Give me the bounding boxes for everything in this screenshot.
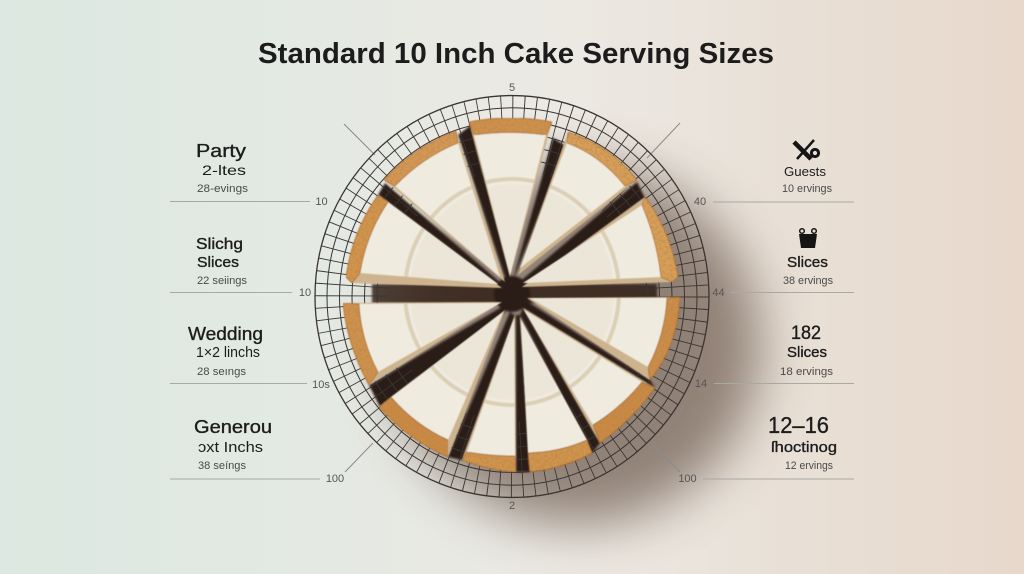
right row: 182 slices: 14 bbox=[695, 378, 707, 390]
slice: upper right bbox=[518, 132, 637, 275]
slice: right upper bbox=[522, 197, 678, 287]
slice: top bbox=[469, 118, 552, 277]
slice: lower left bbox=[379, 310, 505, 457]
right row: Slices: 38 ervings bbox=[783, 275, 833, 287]
right row: 182 slices bbox=[695, 323, 854, 390]
left row: Generous: 100 bbox=[326, 473, 344, 485]
icon: crossed utensils bbox=[794, 140, 819, 159]
leader lines bbox=[344, 123, 680, 472]
right row: Guests: 10 ervings bbox=[782, 183, 832, 195]
right row: Guests: Guests bbox=[784, 164, 827, 179]
left row: Slicing: 22 seiings bbox=[197, 275, 247, 287]
right row: 12-16: 12 ervings bbox=[785, 460, 833, 472]
right row: 12-16: 12–16 bbox=[768, 412, 829, 438]
left row: Party: 10 bbox=[315, 196, 328, 208]
icon: cup with two handles bbox=[799, 229, 817, 248]
right row: Slices: 44 bbox=[712, 287, 725, 299]
right row: Slices: Slices bbox=[787, 254, 828, 271]
right row: 12-16 bbox=[678, 412, 854, 485]
slice: bottom left bbox=[462, 315, 516, 472]
title: Standard 10 Inch Cake Serving Sizes bbox=[258, 38, 774, 70]
left row: Wedding: 28 seıngs bbox=[197, 366, 247, 378]
left row: Party: Party bbox=[196, 141, 246, 161]
left row: Slicing: Slices bbox=[197, 254, 239, 271]
circular measuring grid bbox=[315, 96, 709, 497]
dark gaps between slices bbox=[369, 125, 657, 472]
right row: Guests bbox=[694, 140, 854, 208]
cast shadow of cake bbox=[390, 165, 760, 525]
left row: Slicing bbox=[170, 236, 311, 299]
left row: Party: 28-evings bbox=[197, 183, 249, 195]
left row: Wedding bbox=[170, 324, 330, 391]
slice: lower right bbox=[523, 308, 655, 443]
left row: Wedding: 10s bbox=[312, 379, 330, 391]
left row: Generous: ɔxt Inchs bbox=[198, 439, 263, 456]
scale number: top: 5 bbox=[509, 82, 515, 94]
right row: Guests: 40 bbox=[694, 196, 706, 208]
left row: Party: 2-ltes bbox=[202, 162, 246, 178]
slice: left upper bbox=[346, 195, 502, 288]
slice: right lower bbox=[527, 297, 680, 380]
frosting ring detail bbox=[405, 179, 619, 405]
right row: Slices bbox=[712, 229, 854, 299]
slice: left lower bbox=[343, 302, 502, 385]
left row: Wedding: Wedding bbox=[188, 324, 263, 344]
cake: eleven slices bbox=[343, 118, 680, 472]
left row: Slicing: Slichg bbox=[196, 236, 243, 253]
slice: bottom right bbox=[520, 317, 592, 472]
left row: Slicing: 10 bbox=[299, 287, 311, 299]
left row: Generous: Generou bbox=[194, 417, 272, 437]
left row: Wedding: 1×2 linchs bbox=[196, 344, 260, 361]
right row: 182 slices: 18 ervings bbox=[780, 366, 834, 378]
left row: Generous: 38 seíngs bbox=[198, 460, 247, 472]
right row: 12-16: 100 bbox=[678, 473, 697, 485]
left row: Party bbox=[170, 141, 328, 208]
scale number: bottom: 2 bbox=[509, 500, 515, 512]
left row: Generous bbox=[170, 417, 344, 485]
right row: 12-16: ſhoctinog bbox=[771, 439, 837, 456]
slice: upper left bbox=[384, 131, 505, 282]
right row: 182 slices: 182 bbox=[791, 323, 821, 344]
right row: 182 slices: Slices bbox=[787, 344, 827, 361]
